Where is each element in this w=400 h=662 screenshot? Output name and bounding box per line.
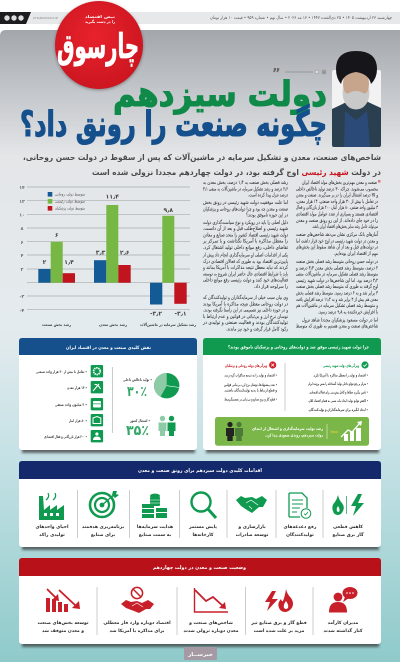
- list: Rouhani and Pezeshkian governments: و قطع ارتباط با بدنه تولیدکنندگان داشتند.: [224, 388, 277, 392]
- article column left: دولت شهید رئیسی اقتصاد کشور را متحد صنایع و معادن: [203, 232, 288, 238]
- status: gas and power cuts: مزید بر علت شده است: [254, 629, 305, 634]
- title decoration: ”: [272, 67, 281, 82]
- status: indicators declining: شاخص‌های صنعت و: [188, 621, 233, 626]
- action: cut gas and power: [332, 494, 364, 538]
- subtitle: [23, 152, 381, 177]
- bars: capital formation: -۳٫۲: [150, 310, 162, 318]
- icon list: [36, 365, 103, 442]
- article column left: باید با شرایط اقتصادی حال حاضر ایران شروع به توسعه: [203, 271, 288, 277]
- icon list: • ۳ میلیون واحد صنفی: [55, 402, 87, 407]
- stat: GDP share: • تولید ناخالص داخلی: [123, 377, 152, 382]
- list: Rouhani and Pezeshkian governments: • اقتصاد و تولید را به نتیجه مذاکرات گره زدند.: [224, 372, 277, 378]
- bars: industry: [38, 232, 75, 283]
- action: targeted planning: برای صنایع: [91, 533, 115, 538]
- footer source tag: خبرســار: [187, 652, 213, 658]
- article column left: یکی از اقدامات اصلی او سرمایه‌گذاری انجام داد پیش از: [202, 252, 288, 258]
- y axis labels: ۲: [21, 267, 24, 273]
- panel header: [19, 558, 381, 576]
- status: indicators declining: معدن دوباره نزولی شدند: [183, 629, 239, 634]
- bars: capital formation: ۹٫۸: [164, 207, 173, 214]
- article column left: در دولت روحانی معطل نتیجه مذاکره با آمریکا بودند: [203, 300, 288, 307]
- article column left: [202, 180, 289, 332]
- result box: دولت سیزدهم، روندی صعودی پیدا کرد.: [265, 432, 324, 438]
- result box: رشد تولید، سرمایه‌گذاری و اشتغال از ابتدای: [252, 426, 323, 431]
- article column left: را معطل مذاکره با آمریکا نگذاشت و با تمرکز بر: [202, 238, 288, 245]
- action: steering capital: به سمت صنایع: [139, 533, 172, 538]
- bars: mining: ۱۱٫۴: [106, 194, 119, 200]
- y axis labels: ۶: [21, 241, 24, 246]
- subtitle: در دولت شهید رئیسی اوج گرفته بود، در دولت چهاردهم مجددا نزولی شده است: [92, 167, 381, 177]
- article column right: محسوب می‌شوند. چراکه ۳۰ درصد تولید ناخالص داخلی: [296, 186, 378, 192]
- article column right: ۳ میلیون واحد صنفی، ۸۰ هزار انبار، ۲۰۰ هزار بازرگانی و فعال: [296, 204, 378, 211]
- bars: mining: ۲٫۶: [120, 250, 130, 256]
- status: development halted: [37, 589, 89, 634]
- portrait: [332, 51, 381, 147]
- action: steering capital: [137, 494, 173, 538]
- action: cut gas and power: کاهش قطعی: [333, 524, 363, 530]
- list: Rouhani and Pezeshkian governments: [224, 361, 277, 402]
- top date strip: چهارشنبه ۲۳ اردیبهشت ۱۴۰۵ • ۲۵ ذی‌القعده ۱۴۴۷ • ۱۳ مه ۲۰۲۶ • سال نهم • شماره ۹۵۹ • قیمت ۱۰ هزار تومان: [210, 16, 392, 21]
- article column left: صنعت و معدن چه بود و چرا دولت‌های روحانی و پزشکیان: [203, 206, 288, 212]
- article column left: اما علت موفقیت دولت شهید رئیسی در رونق بخش: [203, 200, 288, 206]
- action: monitoring factories: [188, 492, 217, 538]
- icon: growth chart: [341, 421, 362, 441]
- status: gas and power cuts: [250, 589, 307, 634]
- article column left: شهید رئیسی و اصلاح‌طلب قبل و بعد از آن دانست.: [203, 225, 288, 232]
- panel header: وضعیت صنعت و معدن در دولت چهاردهم: [153, 565, 246, 571]
- category labels: [42, 322, 197, 327]
- bars: industry: ۶: [55, 232, 59, 239]
- panel: why successful: [203, 338, 381, 453]
- panel header: نقش کلیدی صنعت و معدن در اقتصاد ایران: [66, 345, 151, 351]
- article column right: در تعامل با بیش از ۳۰ هزار واحد صنعتی، ۱۴ هزار معدن،: [296, 199, 378, 205]
- legend: متوسط دولت روحانی: [55, 192, 85, 197]
- action: monitoring factories: پایش مستمر: [188, 525, 217, 530]
- action: targeted planning: [82, 491, 124, 538]
- status: gas and power cuts: قطع گاز و برق صنایع نیز: [250, 619, 307, 626]
- status: economy stalled by negotiations: برای مذاکره با آمریکا شد: [110, 628, 165, 634]
- icon list: • تعامل با بیش از ۳۰ هزار واحد صنعتی: [36, 369, 87, 374]
- bars: industry: ۲: [43, 259, 47, 266]
- legend: متوسط دولت رئیسی: [55, 199, 85, 204]
- status: managers dismissed: مدیران کارآمد: [328, 620, 359, 626]
- action: remove producers' concerns: [284, 493, 317, 538]
- panel header: [203, 338, 381, 355]
- stat: employment share: • اشتغال کشور: [129, 418, 150, 423]
- y axis labels: ۱۰: [19, 214, 25, 218]
- bars: capital formation: [150, 207, 187, 318]
- panel header: [19, 338, 197, 355]
- action: remove producers' concerns: رفع دغدغه‌های: [284, 525, 317, 530]
- article column left: فعالیت‌های خود کنند و دولت رئیسی رفع موانع داخلی: [203, 278, 288, 284]
- bars: capital formation: -۳٫۱: [174, 310, 187, 318]
- logo: نبض اقتصاد: [85, 14, 116, 19]
- category labels: رشد تشکیل سرمایه در ماشین‌آلات: [140, 322, 197, 327]
- article column left: وی بیان سبب خیلی از سرمایه‌گذاران و تولیدکنندگان که: [203, 294, 288, 301]
- panel: status under the 14th government: [19, 558, 381, 647]
- icon: workers: [226, 422, 243, 441]
- panel header: [19, 461, 381, 479]
- subtitle: شاخص‌های صنعت، معدن و تشکیل سرمایه در ماشین‌آلات که پس از سقوط در دولت حسن روحانی،: [23, 152, 381, 163]
- article column left: دلیل اصلی را باید در رویکرد و نوع سیاست‌گذاری دولت: [203, 219, 288, 226]
- action: reviving idle plants: [35, 493, 69, 538]
- panel: key actions of the 13th government: [19, 461, 381, 550]
- action: remove producers' concerns: تولیدکنندگان: [286, 531, 314, 538]
- stat: GDP share: [123, 377, 152, 400]
- icon list: • ۲۰۰ هزار بازرگانی و فعال اقتصادی: [44, 434, 87, 439]
- y axis labels: ۱۴: [19, 186, 25, 191]
- logo: را در دست بگیرید: [85, 19, 115, 24]
- action: market building: [236, 496, 269, 538]
- status: development halted: توسعه بخش‌های صنعت: [37, 621, 89, 626]
- legend: [48, 192, 85, 211]
- footer source tag: [184, 647, 217, 660]
- stat: employment share: ۳۵٪: [126, 423, 149, 439]
- icon list: • ۱۴ هزار معدن: [67, 385, 87, 390]
- panel header: اقدامات کلیدی دولت سیزدهم برای رونق صنعت و معدن: [138, 468, 262, 474]
- category labels: رشد بخش صنعت: [42, 322, 72, 327]
- article column right: ۳٫۲ درصد بود. اما این شاخص‌ها در دولت شهید رئیسی: [296, 278, 378, 284]
- logo: [55, 1, 143, 90]
- bars: industry: ۱٫۴: [64, 259, 74, 266]
- article column left: و در حوزه داخلی نیز تصمیمی در این راستا نگرفته بودند.: [203, 307, 288, 314]
- article column left: نوسان نرخ ارز و بی‌ثباتی در قوانین و عدم ارتباط با: [203, 314, 288, 320]
- article column left: را سرلوحه قرار داد.: [254, 284, 288, 290]
- top date strip: CHARSOOGH.IR: [33, 16, 58, 20]
- status: economy stalled by negotiations: [103, 587, 171, 634]
- article column right: با افزایش خیره‌کننده به ۹٫۸ درصد رسید.: [318, 309, 378, 315]
- status: economy stalled by negotiations: اقتصاد دوباره وارد فاز معطلی: [103, 621, 171, 626]
- icon list: • ۸۰ هزار انبار: [68, 418, 87, 423]
- action: reviving idle plants: احیای واحدهای: [35, 525, 69, 530]
- status: development halted: و معدن متوقف شد: [42, 629, 84, 634]
- article column right: [295, 180, 380, 330]
- article column left: کردند که نباید معطل نتیجه مذاکرات با آمریکا بمانند و: [202, 264, 288, 271]
- article column left: درصد تنزل پیدا کرده است.: [248, 193, 288, 199]
- article column left: رشد فصلی بخش صنعت به ۱٫۴ درصد، بخش معدن به: [203, 180, 288, 186]
- y axis labels: [19, 186, 25, 314]
- y axis labels: ۸: [21, 227, 24, 232]
- bars: mining: [94, 194, 131, 283]
- status: managers dismissed: [324, 587, 363, 634]
- article column right: ۲ درصد، متوسط رشد فصلی بخش معدن ۳٫۳ درصد و: [295, 265, 378, 271]
- list: Rouhani and Pezeshkian governments: • تعدد پیشنهادها، نوسان نرخ ارز، بی‌ثباتی قوانین: [224, 382, 277, 387]
- result box: [215, 417, 369, 446]
- bars: mining: ۳٫۳: [96, 250, 106, 256]
- action: cut gas and power: گاز برق صنایع: [332, 531, 364, 538]
- list: Rouhani and Pezeshkian governments: ویژگی‌های دولت روحانی و پزشکیان: [225, 363, 267, 368]
- y axis labels: ۴: [21, 254, 24, 259]
- y axis labels: -۴: [20, 309, 25, 314]
- logo: چارسوق: [57, 27, 139, 67]
- action: monitoring factories: کارخانه‌ها: [192, 532, 214, 538]
- action: market building: توسعه صادرات: [236, 533, 269, 538]
- action: targeted planning: برنامه‌ریزی هدفمند: [82, 525, 124, 530]
- article column right: مهم از اقتصاد ایران بوده‌ایم.: [334, 251, 378, 257]
- bar chart: [19, 186, 197, 327]
- pie chart: [154, 373, 179, 398]
- action: steering capital: هدایت سرمایه‌ها: [137, 525, 173, 530]
- action: market building: بازارسازی و: [237, 525, 266, 530]
- y axis labels: -۲: [20, 294, 25, 300]
- title decoration: [272, 67, 326, 82]
- status: managers dismissed: کنار گذاشته شدند: [324, 627, 363, 634]
- title line 1: دولت سیزدهم: [113, 75, 327, 115]
- action: reviving idle plants: تولیدی راکد: [39, 532, 65, 538]
- article column left: ۲٫۶ درصد و رشد تشکیل سرمایه در ماشین‌آلات به منفی ۳٫۱: [203, 185, 288, 192]
- y axis labels: ۱۲: [19, 199, 25, 205]
- list: Rouhani and Pezeshkian governments: • قطع گاز و برق صنایع و بی‌ثباتی در تصمیم‌گیری‌ها.: [224, 396, 277, 402]
- status: indicators declining: [183, 588, 239, 634]
- list: Raisi government: • اقتصاد و تولید را معطل مذاکره با آمریکا نکرد.: [313, 372, 368, 378]
- list: Raisi government: [308, 361, 369, 412]
- article column left: تولیدکنندگان بودند و فعالیت صنعتی و تولیدی در: [202, 319, 289, 326]
- article column right: اما در دولت مسعود پزشکیان مجددا شاهد نزول: [302, 317, 378, 323]
- panel: role of industry and mining: [19, 338, 197, 453]
- article column left: پایین‌ترین اقتصاد بود به طوری که فعالان اقتصادی درک: [203, 258, 288, 265]
- legend: متوسط دولت پزشکیان: [55, 206, 85, 211]
- category labels: رشد بخش معدن: [99, 322, 128, 327]
- article column right: ۳ برابر شد و به ۶ درصد رسید. متوسط رشد فصلی بخش: [296, 290, 378, 296]
- list: Raisi government: • ایجاد انگیزه برای سرمایه‌گذاران و تولیدکنندگان.: [308, 407, 368, 412]
- result box: نتیجه:: [330, 428, 338, 434]
- top date strip: [0, 12, 400, 24]
- stat: GDP share: ۳۰٪: [127, 384, 147, 400]
- article column left: تقاضای داخلی، رفع موانع داخلی تولید اشتغال کرد.: [203, 245, 288, 251]
- article column left: در این حوزه ناموفق بودند؟: [246, 213, 288, 219]
- icon: people: [158, 416, 176, 436]
- list: Raisi government: ویژگی‌های دولت شهید رئیسی: [323, 363, 359, 368]
- article column right: معدن هم بیش از ۳ برابر شد و به ۱۱٫۴ درصد افزایش یافت: [296, 297, 378, 303]
- article column left: رکود کامل قرار گرفت و خود نیز ماندند.: [226, 326, 288, 332]
